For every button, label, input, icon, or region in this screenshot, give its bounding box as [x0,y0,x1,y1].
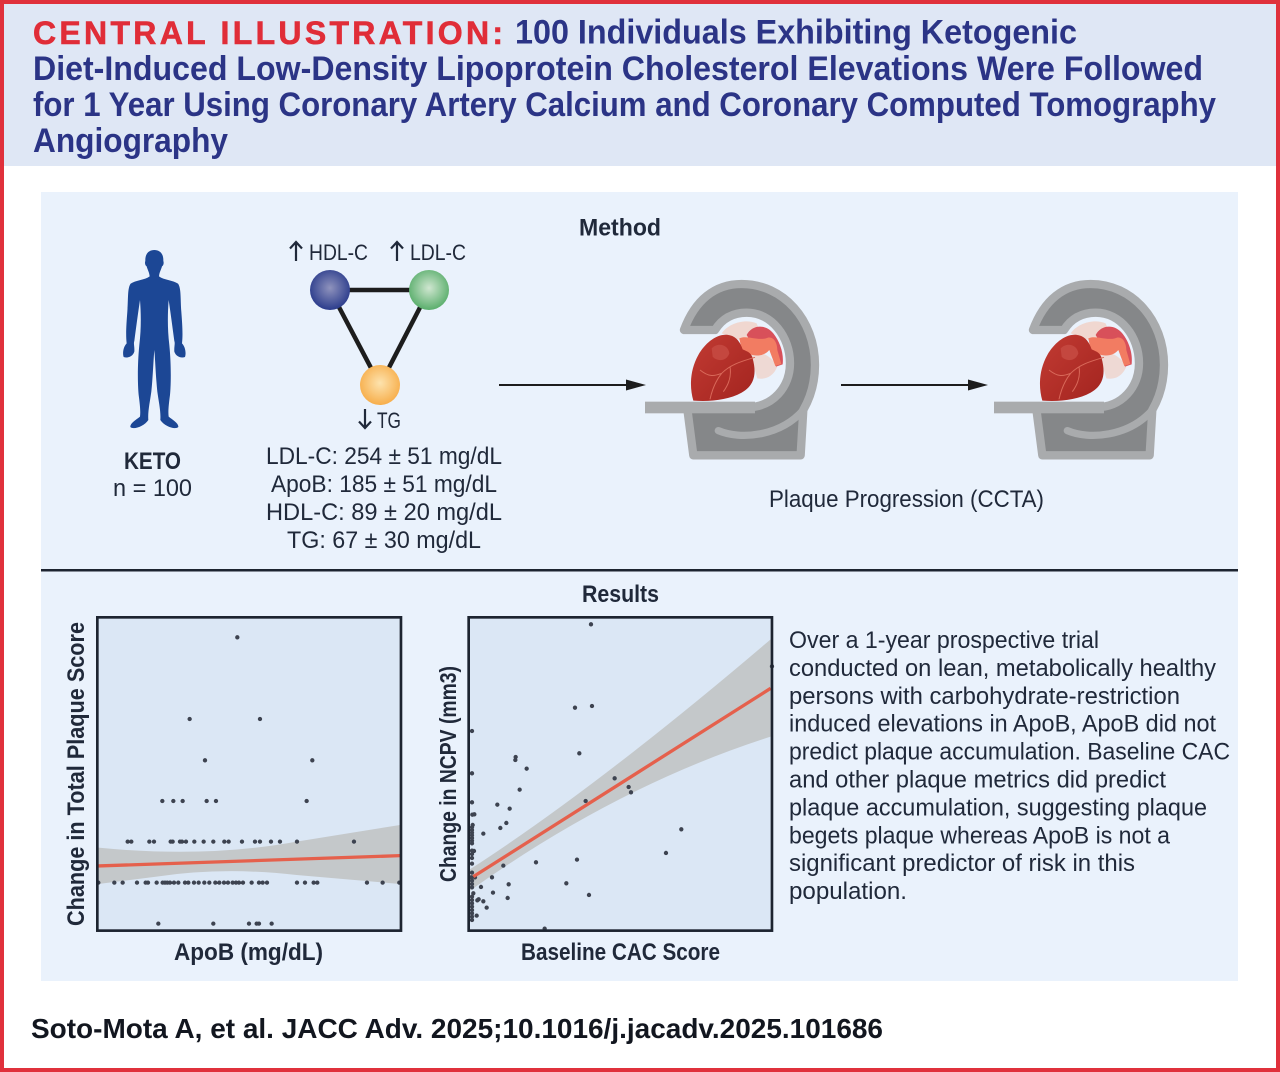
title [33,14,1216,160]
main panel [41,192,1238,981]
conclusion text: population. [789,878,907,905]
citation: Soto-Mota A, et al. JACC Adv. 2025;10.1016/j.jacadv.2025.101686 [31,1013,883,1044]
conclusion text: begets plaque whereas ApoB is not a [789,822,1171,849]
lipid triad diagram: LDL-C [410,240,466,265]
conclusion text: Over a 1-year prospective trial [789,627,1099,654]
baseline lipid values: HDL-C: 89 ± 20 mg/dL [266,499,502,526]
x axis label: ApoB (mg/dL) [174,939,323,966]
lipid triad diagram: HDL-C [309,240,368,265]
conclusion text: induced elevations in ApoB, ApoB did not [789,711,1216,738]
x axis label: Baseline CAC Score [521,939,720,966]
conclusion text: predict plaque accumulation. Baseline CAC [789,739,1230,766]
baseline lipid values: LDL-C: 254 ± 51 mg/dL [266,443,502,470]
icon: second CT scanner with heart [994,284,1164,455]
lipid triad diagram: TG [377,408,401,433]
y axis label: Change in Total Plaque Score [63,622,90,926]
label: keto group: KETO [124,448,181,475]
heading: method: Method [579,214,661,242]
conclusion text: persons with carbohydrate-restriction [789,683,1180,710]
divider [41,569,1238,572]
arrow: first scan to second scan [841,380,988,390]
baseline lipid values [266,443,502,554]
conclusion text: plaque accumulation, suggesting plaque [789,794,1207,821]
icon: first CT scanner with heart [645,284,815,455]
conclusion text: and other plaque metrics did predict [789,766,1166,794]
baseline lipid values: TG: 67 ± 30 mg/dL [287,527,481,554]
title: 100 Individuals Exhibiting Ketogenic [515,14,1077,52]
title: Angiography [33,122,228,160]
conclusion text: significant predictor of risk in this [789,850,1135,877]
chart: change in NCPV vs baseline CAC [435,617,772,966]
heart [691,321,783,401]
lipid triad diagram [290,240,466,433]
chart: change in total plaque score vs ApoB [63,617,401,966]
heading: results: Results [582,581,659,608]
heart [1040,321,1132,401]
label: keto group: n = 100 [113,475,192,502]
label: plaque progression: Plaque Progression (CCTA) [769,486,1044,513]
arrow: keto to first scan [499,380,646,390]
conclusion text [789,627,1230,905]
label: keto group [113,448,192,502]
title: CENTRAL ILLUSTRATION: [33,15,503,51]
header band [4,4,1276,166]
title: Diet-Induced Low-Density Lipoprotein Cholesterol Elevations Were Followed [33,50,1203,88]
y axis label: Change in NCPV (mm3) [435,666,461,882]
conclusion text: conducted on lean, metabolically healthy [789,655,1216,682]
icon: human figure [123,250,186,428]
baseline lipid values: ApoB: 185 ± 51 mg/dL [271,471,497,498]
